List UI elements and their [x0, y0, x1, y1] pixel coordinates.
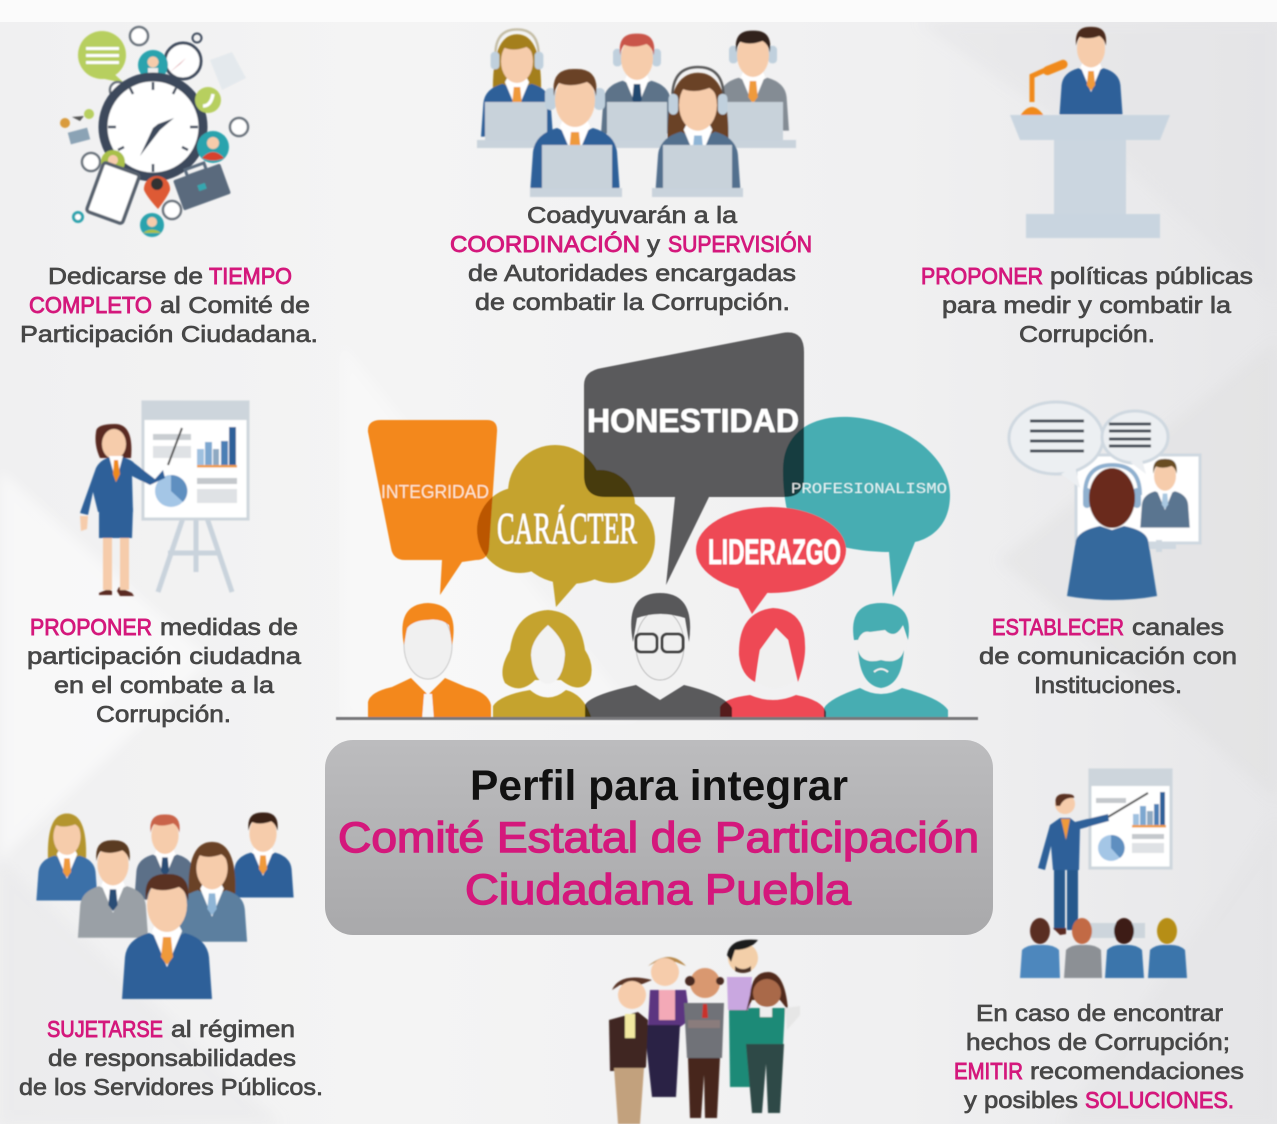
front row woman	[655, 67, 741, 194]
text: tiempo completo: Participación Ciudadana.	[20, 321, 318, 347]
text: establecer canales: de comunicación con	[979, 643, 1237, 669]
bubble: profesionalismo	[783, 417, 950, 597]
bubble: integridad	[368, 420, 497, 595]
silhouette: teal bearded man	[824, 603, 948, 720]
text: tiempo completo: TIEMPO	[209, 263, 292, 289]
text: sujetarse	[19, 1016, 323, 1100]
silhouette: dark man with glasses	[585, 593, 732, 720]
text: emitir recomendaciones: EMITIR	[954, 1058, 1023, 1084]
back row man red hair	[601, 34, 673, 134]
icon: group of officials	[36, 813, 294, 999]
icon: woman presenting chart	[80, 402, 248, 596]
text: proponer medidas: medidas de	[160, 614, 298, 640]
text: coordinación y supervisión: SUPERVISIÓN	[668, 231, 812, 257]
text: proponer medidas	[27, 614, 301, 727]
text: tiempo completo: Dedicarse de	[48, 263, 203, 289]
silhouette: orange man	[368, 603, 491, 720]
text: proponer políticas: Corrupción.	[1019, 321, 1155, 347]
bubble: liderazgo	[696, 507, 846, 614]
speech bubbles and silhouettes	[336, 332, 978, 720]
text: establecer canales: ESTABLECER	[992, 614, 1124, 640]
title panel	[325, 740, 993, 935]
text: proponer políticas: para medir y combatir la	[942, 292, 1231, 318]
text: proponer medidas: PROPONER	[30, 614, 152, 640]
title line 3: Ciudadana Puebla	[465, 866, 851, 914]
text: proponer políticas: políticas públicas	[1050, 263, 1253, 289]
silhouette: gold woman	[493, 610, 592, 720]
icon: people with headsets at laptops	[477, 29, 796, 197]
text: establecer canales	[979, 614, 1237, 698]
audience	[1020, 918, 1187, 978]
right woman	[746, 972, 800, 1113]
text: sujetarse: SUJETARSE	[47, 1016, 163, 1042]
text: tiempo completo: al Comité de	[160, 292, 310, 318]
label: integridad: INTEGRIDAD	[381, 482, 489, 502]
icon: cartoon citizens	[609, 940, 800, 1124]
text: emitir recomendaciones: hechos de Corrupción;	[966, 1029, 1230, 1055]
text: tiempo completo: COMPLETO	[29, 292, 152, 318]
middle man	[684, 968, 724, 1118]
bubble: honestidad	[584, 332, 804, 585]
icon: presenter with audience	[1020, 770, 1187, 978]
text: emitir recomendaciones: SOLUCIONES.	[1085, 1087, 1234, 1113]
back row woman	[481, 29, 553, 137]
text: proponer medidas: participación ciudadna	[27, 643, 301, 669]
text: coordinación y supervisión: Coadyuvarán a la	[527, 202, 737, 228]
text: proponer medidas: Corrupción.	[96, 701, 231, 727]
label: profesionalismo: PROFESIONALISMO	[791, 481, 947, 498]
text: proponer medidas: en el combate a la	[54, 672, 274, 698]
text: coordinación y supervisión: y	[647, 231, 661, 257]
text: emitir recomendaciones: En caso de encontrar	[976, 1000, 1223, 1026]
title line 2: Comité Estatal de Participación	[338, 814, 979, 862]
back man	[727, 940, 758, 1087]
silhouette: red-haired woman	[720, 608, 826, 720]
text: tiempo completo	[20, 263, 318, 347]
back row man dark hair	[717, 31, 789, 131]
second person	[644, 957, 690, 1097]
icon: speaker at podium	[1010, 27, 1170, 238]
text: emitir recomendaciones: recomendaciones	[1030, 1058, 1244, 1084]
text: sujetarse: de responsabilidades	[48, 1045, 296, 1071]
text: coordinación y supervisión: COORDINACIÓN	[450, 231, 640, 257]
text: proponer políticas: PROPONER	[921, 263, 1043, 289]
text: coordinación y supervisión: de Autoridades encargadas	[468, 260, 796, 286]
text: emitir recomendaciones	[954, 1000, 1244, 1113]
front row man	[530, 69, 620, 194]
text: proponer políticas	[921, 263, 1253, 347]
text: sujetarse: de los Servidores Públicos.	[19, 1074, 323, 1100]
label: carácter: CARÁCTER	[497, 504, 637, 553]
text: sujetarse: al régimen	[171, 1016, 295, 1042]
text: emitir recomendaciones: y posibles	[964, 1087, 1078, 1113]
bubble: carácter	[477, 445, 655, 607]
left man	[609, 978, 652, 1124]
icon: clock with surrounding work items	[60, 27, 248, 237]
text: coordinación y supervisión	[450, 202, 812, 315]
text: coordinación y supervisión: de combatir la Corrupción.	[475, 289, 790, 315]
label: honestidad: HONESTIDAD	[587, 402, 799, 439]
text: establecer canales: Instituciones.	[1034, 672, 1182, 698]
icon: video conference	[1009, 402, 1200, 600]
title line 1: Perfil para integrar	[470, 762, 848, 810]
label: liderazgo: LIDERAZGO	[708, 533, 841, 572]
text: establecer canales: canales	[1132, 614, 1224, 640]
